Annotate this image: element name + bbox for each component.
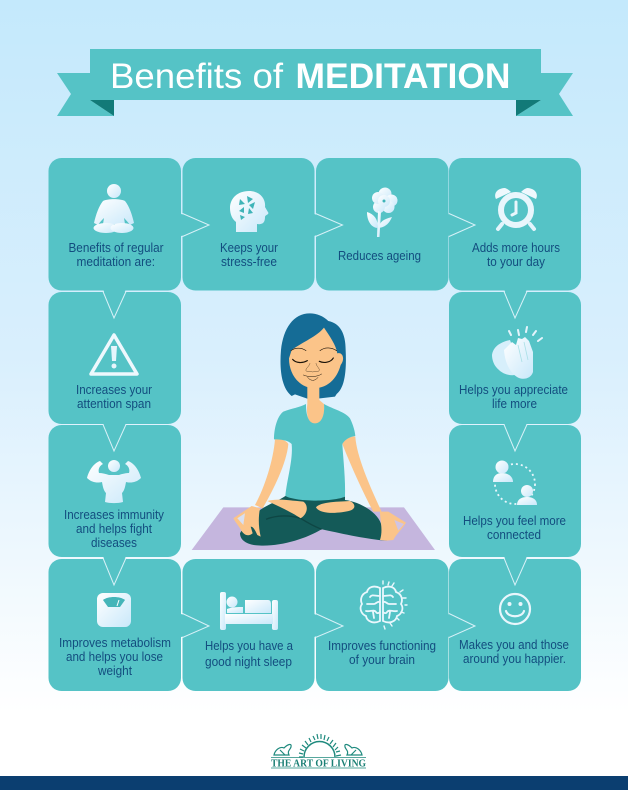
icon: alarm clock	[495, 188, 537, 229]
icon: warning triangle	[91, 335, 137, 374]
panel: attention span	[48, 292, 181, 424]
text: improves metabolism: weight	[97, 664, 132, 678]
title banner	[57, 49, 573, 116]
panel: brain function	[316, 559, 448, 691]
feet	[267, 500, 354, 518]
text: benefits of regular meditation are: meditation are:	[76, 255, 155, 269]
hair	[280, 313, 346, 399]
neck	[307, 383, 324, 424]
panel: reduces ageing	[316, 158, 448, 290]
logo text: THE ART OF LIVING	[271, 758, 366, 770]
text: improves functioning of your brain: Improves functioning	[328, 639, 436, 653]
icon: muscular torso	[87, 460, 141, 503]
facial features	[291, 348, 337, 380]
title text: Benefits of	[110, 57, 283, 96]
panel: metabolism	[48, 559, 181, 691]
text: increases your attention span: Increases your	[76, 383, 152, 397]
text: increases your attention span: attention span	[77, 397, 151, 411]
rules	[271, 758, 366, 768]
icon: smiley face	[500, 594, 530, 624]
text: helps you appreciate life more: life more	[492, 397, 537, 411]
panel: immunity	[48, 425, 181, 557]
arrows connecting the panels	[103, 214, 527, 638]
text: improves metabolism: Improves metabolism	[59, 636, 171, 650]
panel: keeps you stress-free	[182, 158, 314, 290]
icon: head with leaves	[230, 191, 268, 232]
icon: flower	[367, 188, 398, 237]
text: helps you feel more connected: Helps you feel more	[463, 514, 566, 528]
text: helps you have a good night sleep: Helps you have a	[205, 639, 293, 653]
text: adds more hours to your day: to your day	[487, 255, 546, 269]
text: adds more hours to your day: Adds more hours	[472, 241, 560, 255]
legs	[240, 496, 387, 546]
panel: happier	[449, 559, 581, 691]
swans	[274, 744, 362, 755]
text: improves metabolism: and helps you lose	[66, 650, 163, 664]
icon: bed	[220, 592, 278, 630]
illustration: woman meditating on a mat	[192, 313, 435, 550]
face	[289, 328, 343, 388]
panel: feel more connected	[449, 425, 581, 557]
icon: clapping hands	[492, 327, 542, 379]
text: makes you and those around you happier: Makes you and those	[459, 638, 569, 652]
panel: benefits of regular meditation	[48, 158, 181, 290]
text: helps you feel more connected: connected	[487, 528, 541, 542]
text: makes you and those around you happier: around you happier.	[463, 652, 566, 666]
footer bar	[0, 776, 628, 790]
text: keeps your stress-free: Keeps your	[220, 241, 278, 255]
arms	[255, 437, 382, 512]
shirt	[274, 404, 355, 502]
text: increases immunity: Increases immunity	[64, 508, 165, 522]
text: improves functioning of your brain: of your brain	[349, 653, 415, 667]
panel: adds more hours	[449, 158, 581, 290]
text: reduces ageing: Reduces ageing	[338, 249, 421, 263]
text: increases immunity: diseases	[91, 536, 137, 550]
icon: brain	[361, 581, 407, 629]
sun	[299, 734, 341, 757]
hands	[233, 506, 406, 541]
text: helps you have a good night sleep: good night sleep	[205, 655, 292, 669]
text: benefits of regular meditation are: Benefits of regular	[68, 241, 164, 255]
logo: The Art of Living	[271, 734, 366, 770]
panel: good night sleep	[182, 559, 314, 691]
panel: appreciate life	[449, 292, 581, 424]
icon: meditating person	[94, 184, 134, 233]
yoga mat	[192, 507, 435, 550]
icon: weighing scale	[97, 593, 131, 627]
text: increases immunity: and helps fight	[76, 522, 152, 536]
icon: connected people	[493, 460, 537, 505]
text: keeps your stress-free: stress-free	[221, 255, 277, 269]
title text: MEDITATION	[296, 57, 510, 96]
text: helps you appreciate life more: Helps you appreciate	[459, 383, 568, 397]
